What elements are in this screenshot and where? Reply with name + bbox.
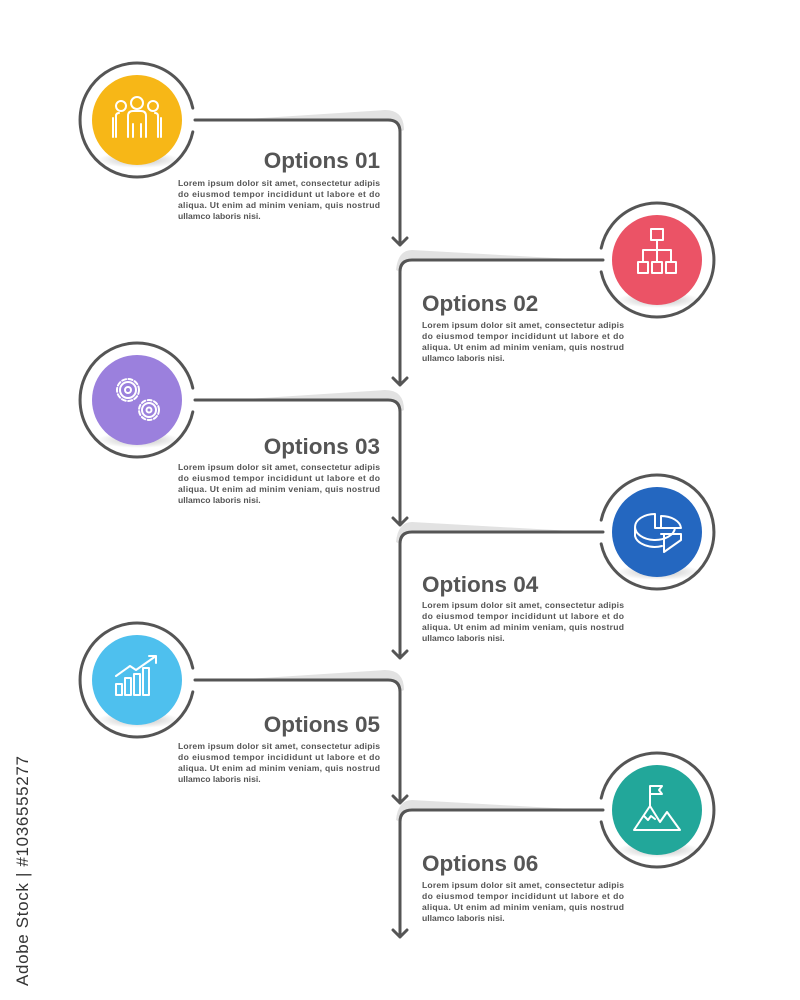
text 05: ullamco laboris nisi. xyxy=(178,774,261,784)
text 03: Lorem ipsum dolor sit amet, consectetur adipis xyxy=(178,462,380,472)
text 01: ullamco laboris nisi. xyxy=(178,211,261,221)
icon circle: hierarchy xyxy=(612,215,702,308)
title 02: Options 02 xyxy=(422,291,538,316)
watermark id text: Adobe Stock | #1036555277 xyxy=(13,756,32,986)
step 04 xyxy=(393,475,714,658)
text 03: aliqua. Ut enim ad minim veniam, quis nostrud xyxy=(178,484,380,494)
text 02: Lorem ipsum dolor sit amet, consectetur adipis xyxy=(422,320,624,330)
connector 03 xyxy=(195,390,407,525)
step 01 xyxy=(80,63,407,245)
icon circle: mountain flag xyxy=(612,765,702,858)
connector 04 xyxy=(393,522,603,658)
text 06: aliqua. Ut enim ad minim veniam, quis nostrud xyxy=(422,902,624,912)
text 05: aliqua. Ut enim ad minim veniam, quis nostrud xyxy=(178,763,380,773)
text 06: Lorem ipsum dolor sit amet, consectetur adipis xyxy=(422,880,624,890)
text 06 xyxy=(422,880,624,923)
step 06 xyxy=(393,753,714,937)
step 05 xyxy=(80,623,407,803)
text 01: aliqua. Ut enim ad minim veniam, quis nostrud xyxy=(178,200,380,210)
text 01 xyxy=(178,178,380,221)
title 01: Options 01 xyxy=(264,148,380,173)
connector 05 xyxy=(195,670,407,803)
ring 02 xyxy=(601,203,714,317)
icon circle: pie chart xyxy=(612,487,702,580)
text 04 xyxy=(422,600,624,643)
text 04: do eiusmod tempor incididunt ut labore et do xyxy=(422,611,624,621)
connector 02 xyxy=(393,250,603,385)
title 06: Options 06 xyxy=(422,851,538,876)
step 03 xyxy=(80,343,407,525)
icon circle: people xyxy=(92,75,182,168)
text 02: do eiusmod tempor incididunt ut labore et do xyxy=(422,331,624,341)
text 02 xyxy=(422,320,624,363)
text 01: do eiusmod tempor incididunt ut labore et do xyxy=(178,189,380,199)
text 05: do eiusmod tempor incididunt ut labore et do xyxy=(178,752,380,762)
title 03: Options 03 xyxy=(264,434,380,459)
text 04: ullamco laboris nisi. xyxy=(422,633,505,643)
text 04: aliqua. Ut enim ad minim veniam, quis nostrud xyxy=(422,622,624,632)
ring 03 xyxy=(80,343,193,457)
text 05: Lorem ipsum dolor sit amet, consectetur adipis xyxy=(178,741,380,751)
text 05 xyxy=(178,741,380,784)
text 03: ullamco laboris nisi. xyxy=(178,495,261,505)
icon circle: growth chart xyxy=(92,635,182,728)
text 02: aliqua. Ut enim ad minim veniam, quis nostrud xyxy=(422,342,624,352)
title 05: Options 05 xyxy=(264,712,380,737)
ring 01 xyxy=(80,63,193,177)
step 02 xyxy=(393,203,714,385)
text 04: Lorem ipsum dolor sit amet, consectetur adipis xyxy=(422,600,624,610)
connector 01 xyxy=(195,110,407,245)
text 01: Lorem ipsum dolor sit amet, consectetur adipis xyxy=(178,178,380,188)
title 04: Options 04 xyxy=(422,572,539,597)
ring 04 xyxy=(601,475,714,589)
ring 06 xyxy=(601,753,714,867)
ring 05 xyxy=(80,623,193,737)
text 06: ullamco laboris nisi. xyxy=(422,913,505,923)
text 02: ullamco laboris nisi. xyxy=(422,353,505,363)
text 06: do eiusmod tempor incididunt ut labore et do xyxy=(422,891,624,901)
connector 06 xyxy=(393,800,603,937)
text 03: do eiusmod tempor incididunt ut labore et do xyxy=(178,473,380,483)
text 03 xyxy=(178,462,380,505)
icon circle: gears xyxy=(92,355,182,448)
